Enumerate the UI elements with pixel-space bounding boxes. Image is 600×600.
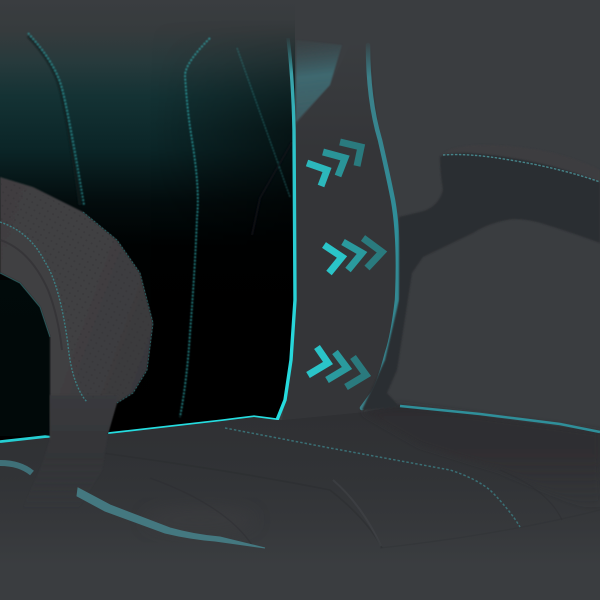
panel: seat	[0, 405, 600, 600]
panel: left armrest	[0, 177, 153, 510]
arrows: middle chevrons	[324, 238, 382, 273]
right armrest stitching	[443, 155, 600, 182]
arrows: upper chevrons	[307, 142, 361, 186]
backrest stitching	[28, 33, 292, 417]
panel: dark teal backrest	[0, 0, 295, 443]
teal bolster curve	[362, 45, 398, 408]
arrows: lower chevrons	[308, 347, 366, 387]
seat stitching	[225, 428, 520, 527]
panel: right armrest	[362, 145, 600, 410]
left teal seat strip	[0, 463, 32, 473]
panel: side bolster	[282, 40, 400, 420]
front teal seat strip	[77, 488, 265, 548]
cyan backrest edge line	[108, 38, 295, 434]
cyan line left segment	[0, 437, 54, 442]
right armrest teal line	[400, 406, 600, 432]
